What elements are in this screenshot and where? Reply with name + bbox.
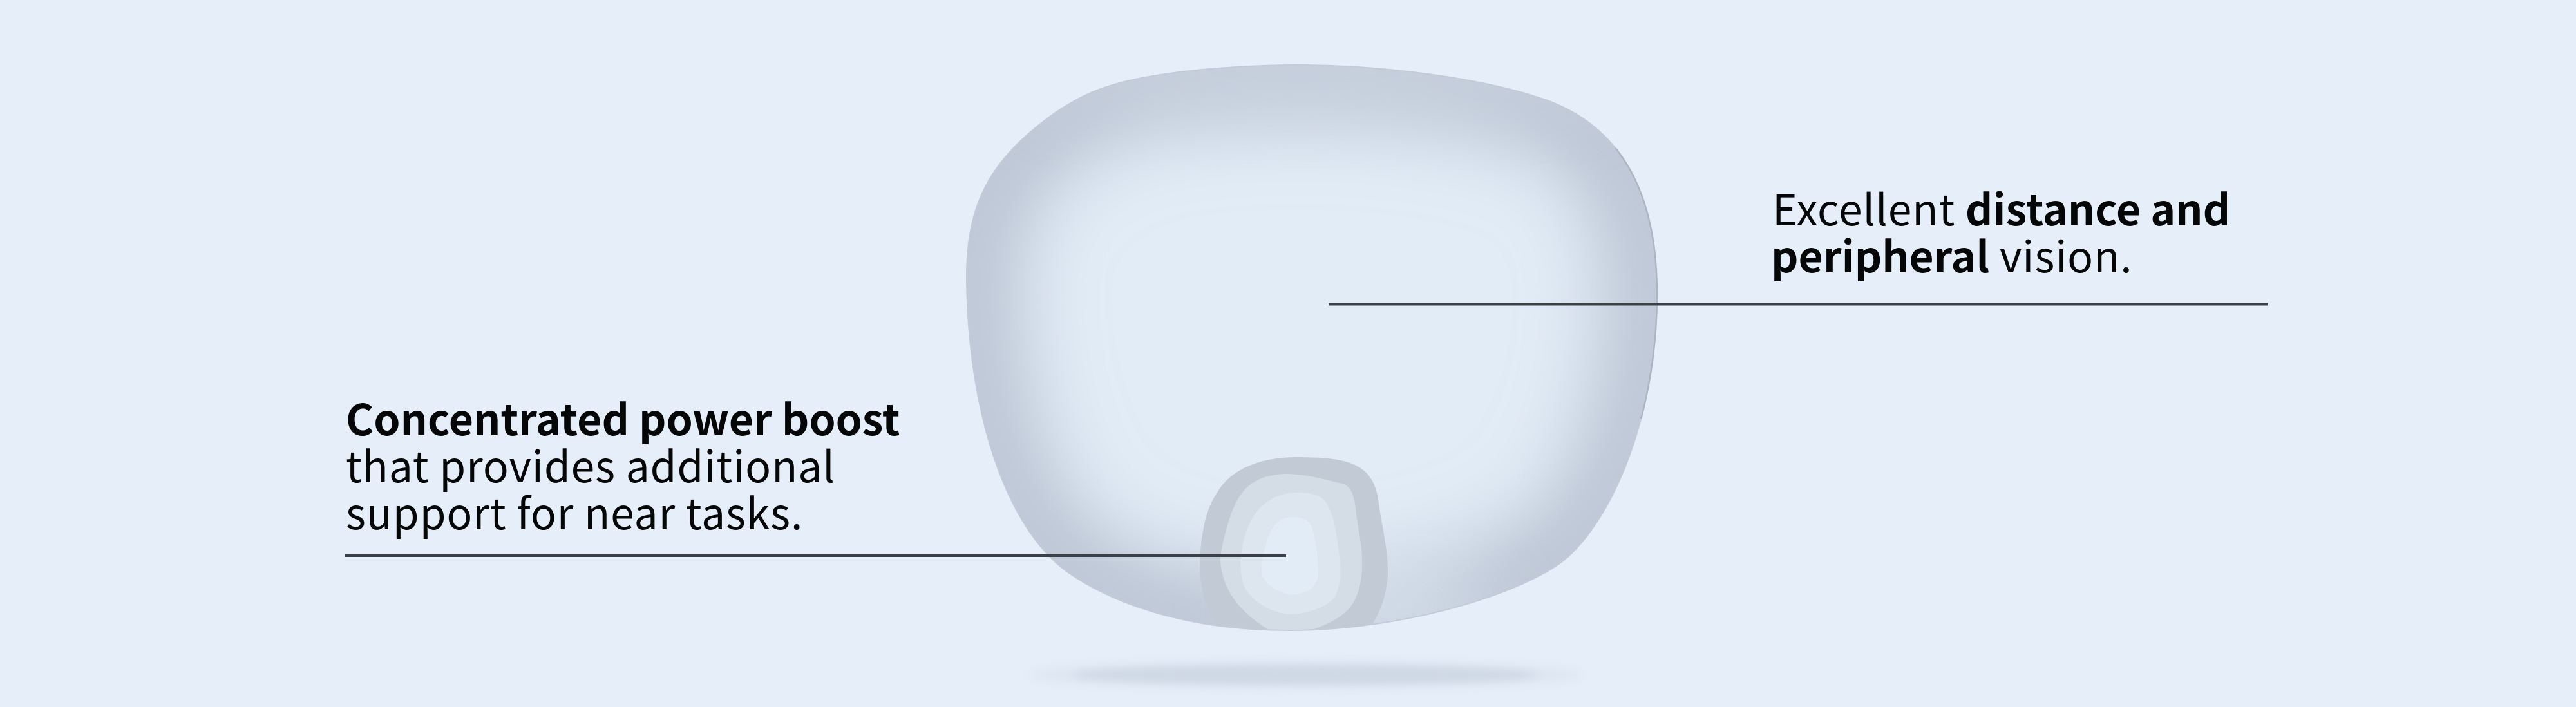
lens right edge highlight <box>1615 148 1658 419</box>
leader line: power boost <box>345 554 1286 557</box>
callout: power boost: that provides additional <box>346 433 835 495</box>
callout text: power boost: Concentrated power boost <box>346 386 900 448</box>
callout text: distance: Excellent distance and <box>1772 176 2230 238</box>
infographic <box>345 64 2268 688</box>
leader line: distance <box>1329 303 2268 305</box>
middle zone <box>1220 474 1362 632</box>
lens shadow <box>1027 662 1584 688</box>
callout: distance and peripheral vision <box>1329 176 2268 305</box>
power boost zones <box>1200 457 1388 632</box>
lens edge shading <box>967 26 1657 637</box>
callout: distance and peripheral vision: peripheral vision. <box>1771 223 2132 285</box>
core zone <box>1262 517 1318 595</box>
inner zone <box>1240 493 1341 614</box>
outer zone <box>1200 457 1388 632</box>
callout: power boost: support for near tasks. <box>346 480 803 542</box>
lens <box>967 26 1657 637</box>
lens body <box>967 65 1657 630</box>
top shading <box>998 26 1616 116</box>
callout: power boost <box>345 386 1286 557</box>
lens rim <box>967 65 1657 630</box>
bottom centre highlight <box>1373 573 1463 623</box>
